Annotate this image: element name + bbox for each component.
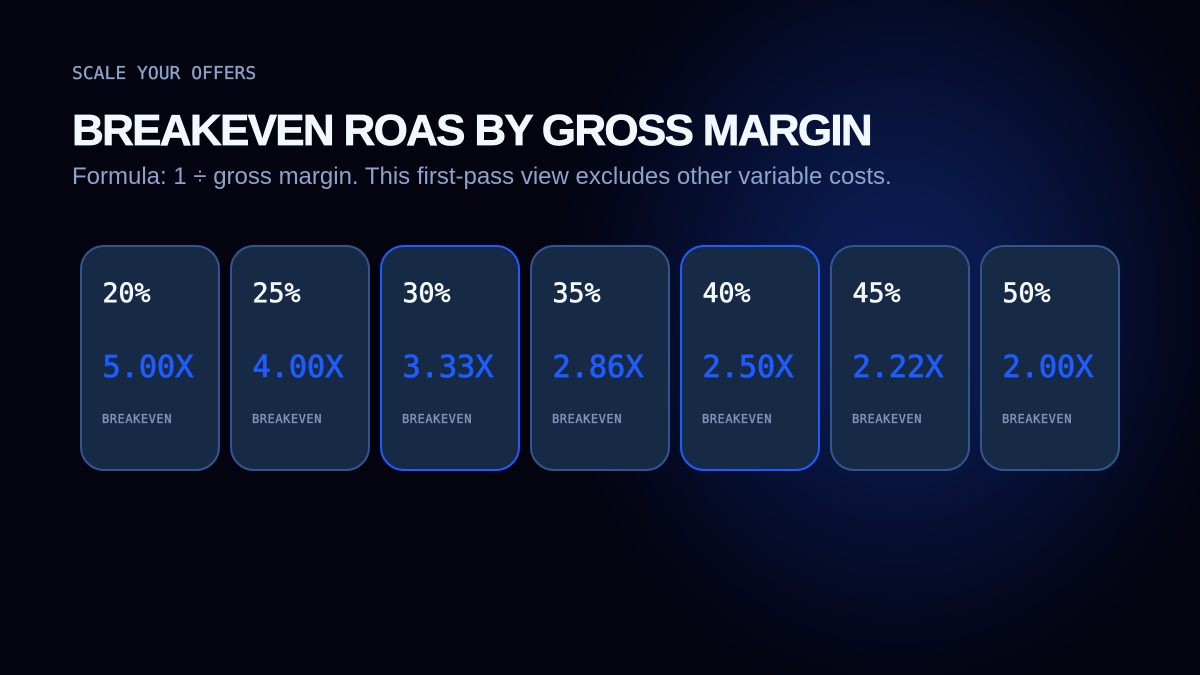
card: 40% margin (highlighted): BREAKEVEN [702,412,772,426]
card: 50% margin: 2.00X [1002,350,1093,385]
card: 30% margin (highlighted): BREAKEVEN [402,412,472,426]
eyebrow label: SCALE YOUR OFFERS [72,63,256,84]
card: 45% margin: 45% [852,278,901,309]
card: 45% margin [830,245,970,471]
card: 20% margin: 5.00X [102,350,193,385]
card: 20% margin [80,245,220,471]
card: 25% margin: 4.00X [252,350,343,385]
card: 50% margin [980,245,1120,471]
card: 35% margin: 35% [552,278,601,309]
card: 35% margin: BREAKEVEN [552,412,622,426]
card: 45% margin: BREAKEVEN [852,412,922,426]
card: 20% margin: 20% [102,278,151,309]
card: 35% margin: 2.86X [552,350,643,385]
card: 40% margin (highlighted): 40% [702,278,751,309]
card: 35% margin [530,245,670,471]
card: 45% margin: 2.22X [852,350,943,385]
card: 50% margin: 50% [1002,278,1051,309]
card: 30% margin (highlighted): 30% [402,278,451,309]
card: 30% margin (highlighted): 3.33X [402,350,493,385]
card: 25% margin [230,245,370,471]
title: BREAKEVEN ROAS BY GROSS MARGIN [72,106,871,155]
card: 30% margin (highlighted) [380,245,520,471]
card: 25% margin: 25% [252,278,301,309]
card: 40% margin (highlighted) [680,245,820,471]
subtitle: formula: Formula: 1 ÷ gross margin. This first-pass view excludes other variable costs. [72,163,892,190]
card: 40% margin (highlighted): 2.50X [702,350,793,385]
card: 20% margin: BREAKEVEN [102,412,172,426]
card: 25% margin: BREAKEVEN [252,412,322,426]
card: 50% margin: BREAKEVEN [1002,412,1072,426]
